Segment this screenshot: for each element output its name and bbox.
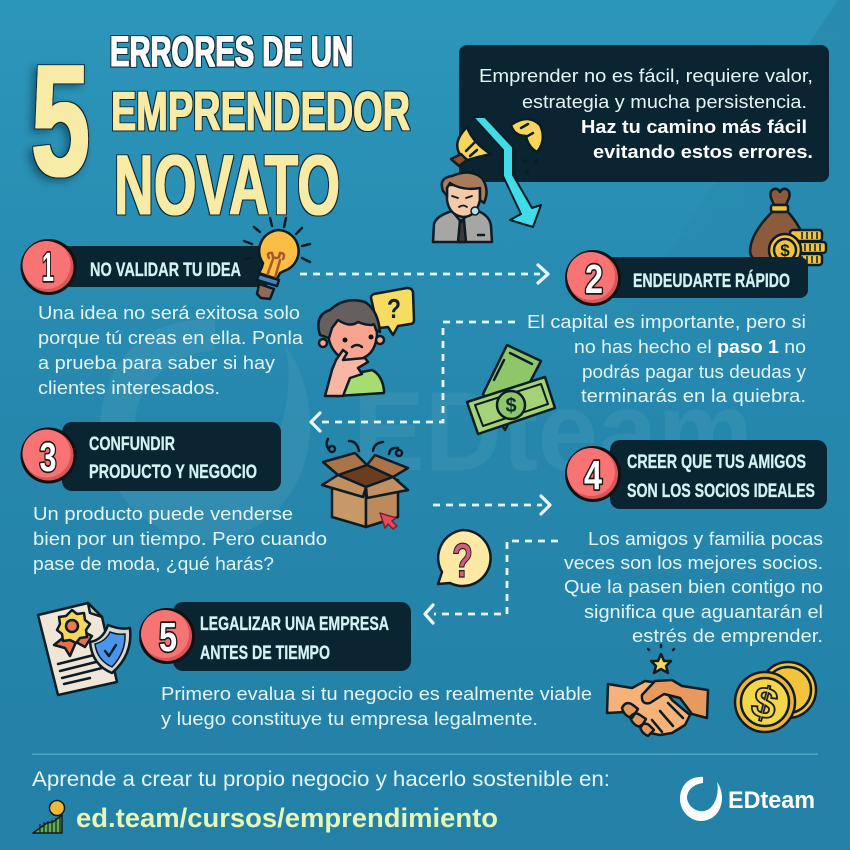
icon: thinking person: [318, 288, 414, 396]
icon: sad man: [433, 172, 492, 242]
heading bar 5: LEGALIZAR UNA EMPRESA: [200, 614, 389, 635]
icon: thinking person: ?: [387, 293, 401, 324]
badge 2: [566, 252, 620, 304]
footer text: Aprende a crear tu propio negocio y hacerlo sostenible en:: [32, 768, 610, 791]
heading bar 4: [610, 440, 827, 509]
badge 1: [22, 240, 75, 294]
divider: [32, 754, 818, 755]
icon: handshake: [607, 645, 708, 736]
heading bar 1: NO VALIDAR TU IDEA: [90, 260, 241, 281]
watermark logo: EDteam: [353, 369, 753, 494]
text 1: Una idea no será exitosa solo: [38, 303, 300, 323]
text 2: [527, 312, 806, 406]
connector: step 3 to 4: [433, 496, 550, 514]
big number 5: 5: [31, 33, 90, 209]
step 4: [564, 440, 827, 646]
text 4: veces son los mejores socios.: [564, 553, 823, 573]
badge 4: 4: [584, 452, 602, 498]
course link: ed.team/cursos/emprendimiento: [76, 803, 498, 833]
text 2: El capital es importante, pero si: [527, 312, 806, 332]
intro text: estrategia y mucha persistencia.: [522, 91, 807, 112]
heading bar 3: PRODUCTO Y NEGOCIO: [89, 462, 257, 483]
icon: falling arrow: [473, 117, 541, 227]
icon: question bubble: [438, 530, 491, 588]
icon: banknotes: [467, 345, 555, 434]
icon: money bag: $: [780, 241, 790, 260]
icon: money bag: [750, 189, 826, 266]
badge 5: 5: [159, 614, 177, 660]
text 3: bien por un tiempo. Pero cuando: [33, 529, 327, 549]
step 1: [22, 218, 310, 398]
intro panel: [459, 45, 829, 182]
watermark logo: [100, 320, 753, 540]
heading bar 2: [605, 257, 808, 298]
badge 4: [566, 448, 620, 500]
text 3: [33, 504, 327, 574]
text 4: significa que aguantarán el: [584, 602, 823, 622]
intro text: evitando estos errores.: [593, 141, 813, 162]
text 2: terminarás en la quiebra.: [581, 386, 806, 406]
text 4: Los amigos y familia pocas: [588, 529, 823, 549]
intro text: Emprender no es fácil, requiere valor,: [479, 65, 813, 86]
connector: step 4 to 5: [425, 541, 558, 623]
heading bar 3: CONFUNDIR: [89, 434, 175, 455]
icon: open box: [322, 439, 408, 529]
badge 2: 2: [585, 256, 603, 302]
step 3: [22, 422, 327, 574]
connector: step 1 to 2: [300, 265, 548, 283]
intro text: [479, 65, 813, 162]
text 5: [161, 684, 592, 729]
heading bar 1: [60, 246, 270, 287]
text 2: podrás pagar tus deudas y: [582, 362, 806, 382]
text 3: pase de moda, ¿qué harás?: [33, 554, 274, 574]
step 2: [527, 252, 808, 406]
logo EDteam: EDteam: [728, 787, 815, 814]
icon: coins: $: [746, 677, 783, 730]
badge 3: [22, 429, 75, 482]
text 2: no has hecho el paso 1 no: [574, 337, 806, 357]
text 1: [38, 303, 304, 398]
icon: certificate and shield: [38, 603, 130, 695]
text 4: estrés de emprender.: [632, 626, 823, 646]
text 5: y luego constituye tu empresa legalmente.: [161, 709, 538, 729]
icon: banknotes: $: [505, 395, 517, 417]
text 1: a prueba para saber si hay: [38, 353, 275, 373]
text 1: porque tú creas en ella. Ponla: [38, 328, 304, 348]
icon: broken bulb: [451, 119, 543, 174]
text 4: Que la pasen bien contigo no: [564, 577, 823, 597]
heading bar 2: ENDEUDARTE RÁPIDO: [633, 270, 790, 292]
icon: coins: [735, 662, 816, 732]
heading bar 5: [173, 602, 411, 671]
title line 2: EMPRENDEDOR: [111, 80, 410, 142]
badge 1: 1: [42, 244, 54, 290]
text 1: clientes interesados.: [38, 378, 220, 398]
title: [31, 28, 410, 232]
heading bar 5: ANTES DE TIEMPO: [200, 643, 330, 664]
intro text: Haz tu camino más fácil: [581, 116, 807, 137]
logo EDteam: [680, 777, 815, 821]
connector: step 2 to 3: [311, 322, 515, 431]
text 4: [564, 529, 823, 646]
icon: light bulb: [244, 218, 310, 299]
badge 3: 3: [40, 434, 56, 480]
text 5: Primero evalua si tu negocio es realmente viable: [161, 684, 592, 704]
title line 1: ERRORES DE UN: [110, 28, 353, 76]
text 3: Un producto puede venderse: [33, 504, 293, 524]
badge 5: [140, 610, 194, 662]
step 5: [140, 602, 592, 729]
icon: question bubble: ?: [452, 535, 473, 588]
title line 3: NOVATO: [114, 138, 340, 232]
icon: growth chart: [33, 800, 64, 833]
heading bar 3: [62, 422, 281, 491]
